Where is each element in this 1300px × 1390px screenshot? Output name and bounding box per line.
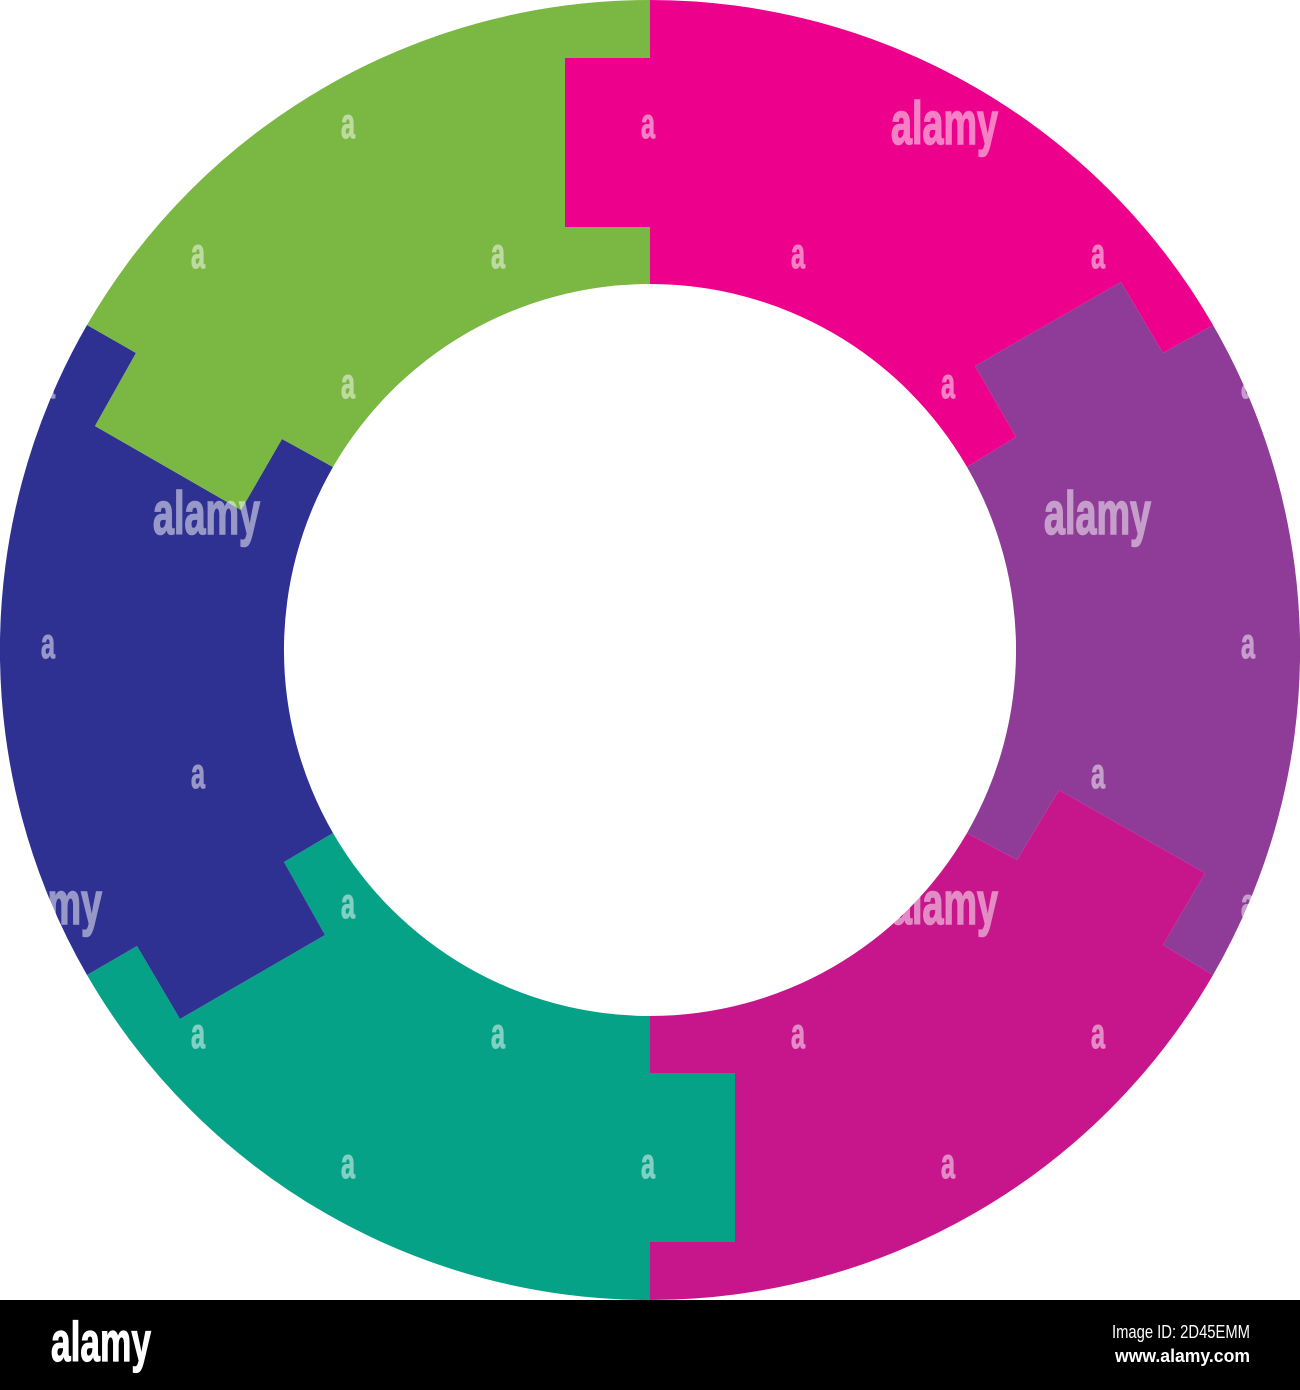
- segment: navy left: [0, 325, 333, 1019]
- watermark: alamy text overlays: a: [341, 880, 356, 928]
- watermark: alamy text overlays: a: [641, 1140, 656, 1188]
- watermark: alamy text overlays: alamy: [891, 90, 998, 157]
- watermark: alamy text overlays: a: [1241, 880, 1256, 928]
- watermark: alamy text overlays: a: [1091, 230, 1106, 278]
- segment: purple right: [967, 282, 1300, 975]
- footer website: www.alamy.com: [1114, 1346, 1250, 1366]
- segment: magenta bottom right: [650, 790, 1213, 1300]
- watermark: alamy text overlays: alamy: [153, 480, 260, 547]
- watermark: alamy text overlays: alamy: [1044, 480, 1151, 547]
- footer logo: alamy: [51, 1310, 151, 1373]
- footer bar: [0, 1300, 1300, 1390]
- watermark: alamy text overlays: a: [791, 230, 806, 278]
- watermark: alamy text overlays: a: [491, 1010, 506, 1058]
- watermark: alamy text overlays: a: [41, 360, 56, 408]
- watermark: alamy text overlays: a: [191, 1010, 206, 1058]
- watermark: alamy text overlays: a: [941, 360, 956, 408]
- segment: pink top right: [565, 0, 1213, 467]
- watermark: alamy text overlays: alamy: [0, 870, 102, 937]
- watermark: alamy text overlays: a: [341, 1140, 356, 1188]
- watermark: alamy text overlays: a: [341, 360, 356, 408]
- watermark: alamy text overlays: a: [1091, 1010, 1106, 1058]
- footer image id: Image ID: 2D45EMM: [1112, 1322, 1250, 1342]
- watermark: alamy text overlays: a: [1241, 620, 1256, 668]
- watermark: alamy text overlays: a: [341, 100, 356, 148]
- watermark: alamy text overlays: alamy: [891, 870, 998, 937]
- watermark: alamy text overlays: a: [791, 1010, 806, 1058]
- watermark: alamy text overlays: a: [41, 620, 56, 668]
- watermark: alamy text overlays: a: [1091, 750, 1106, 798]
- watermark: alamy text overlays: a: [1241, 360, 1256, 408]
- watermark: alamy text overlays: a: [191, 750, 206, 798]
- watermark: alamy text overlays: [0, 90, 1256, 1188]
- watermark: alamy text overlays: a: [941, 1140, 956, 1188]
- watermark: alamy text overlays: a: [191, 230, 206, 278]
- watermark: alamy text overlays: a: [491, 230, 506, 278]
- watermark: alamy text overlays: a: [641, 100, 656, 148]
- segment: green top left: [87, 0, 650, 510]
- segment: teal bottom left: [87, 833, 735, 1300]
